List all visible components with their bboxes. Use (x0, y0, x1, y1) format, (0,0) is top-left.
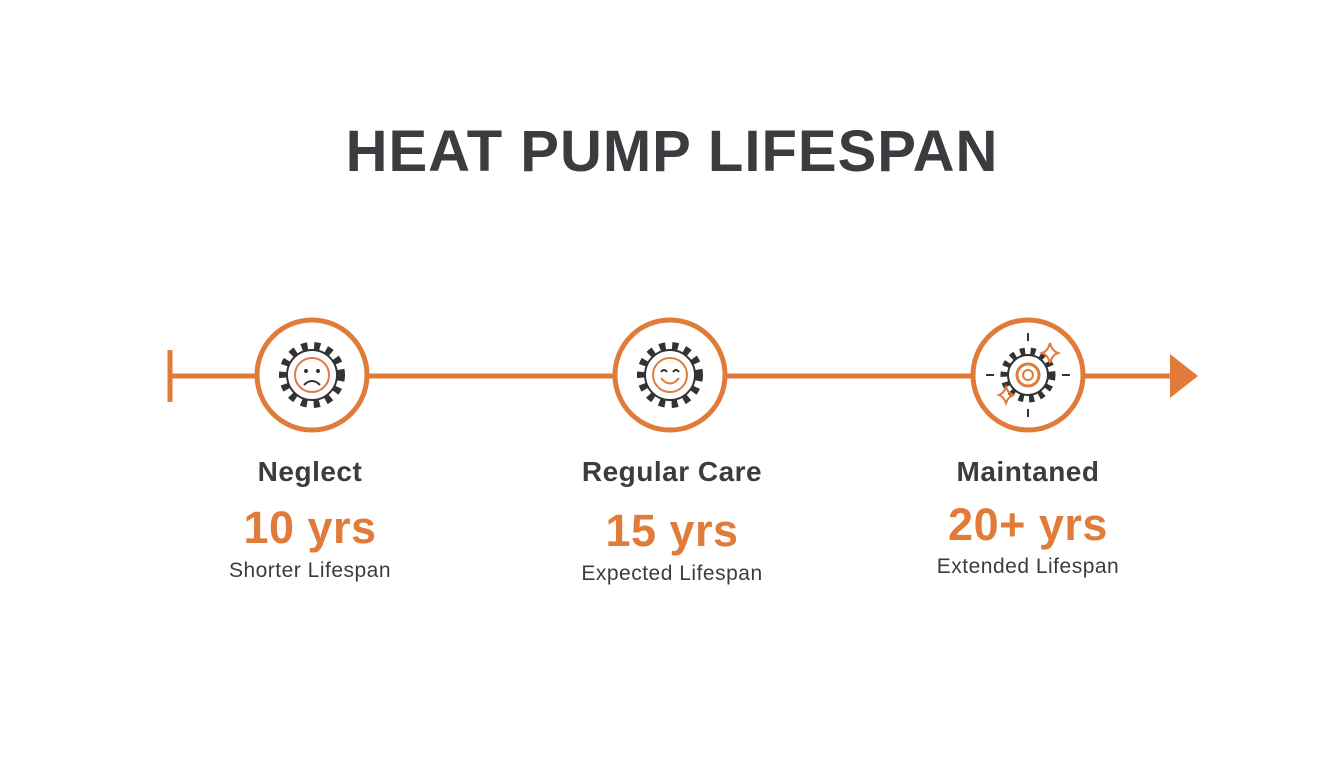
column: regular care: 15 yrs (605, 505, 739, 556)
column: neglect: Neglect (258, 456, 362, 487)
column: maintained: 20+ yrs (948, 499, 1108, 550)
column: regular care (581, 456, 763, 585)
icon: sparkling gear (973, 320, 1083, 430)
column: regular care: Expected Lifespan (581, 562, 763, 585)
column: neglect: Shorter Lifespan (229, 559, 391, 582)
timeline line (170, 350, 1198, 402)
column: maintained: Maintaned (957, 456, 1099, 487)
column: neglect: 10 yrs (243, 502, 377, 553)
column: maintained: Extended Lifespan (937, 555, 1119, 578)
column: maintained (937, 456, 1119, 578)
icon: sad gear (257, 320, 367, 430)
column: regular care: Regular Care (582, 456, 762, 487)
icon: happy gear (615, 320, 725, 430)
column: neglect (229, 456, 391, 582)
title: HEAT PUMP LIFESPAN (346, 119, 998, 184)
